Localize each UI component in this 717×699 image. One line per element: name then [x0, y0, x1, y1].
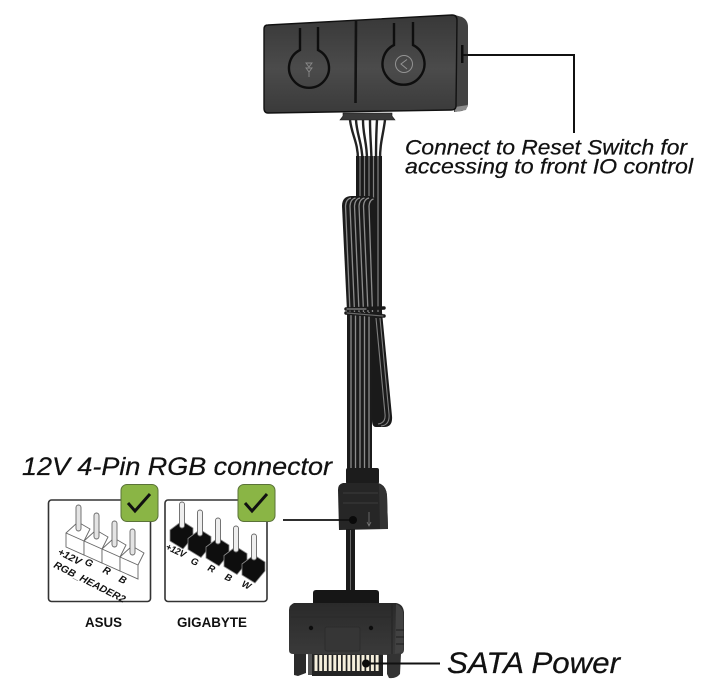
folded loop upper [342, 196, 377, 312]
lower straight wires [347, 312, 372, 469]
seam between buttons [354, 21, 357, 103]
label: reset switch: accessing to front IO control [405, 156, 694, 178]
keyhole right [382, 22, 425, 85]
cable tie [346, 308, 384, 316]
label: GIGABYTE: GIGABYTE [177, 615, 247, 630]
icon: arrows [306, 63, 312, 77]
icon: logo [396, 56, 412, 72]
pin labels: R [101, 565, 113, 578]
box neck [340, 113, 395, 120]
pin labels [164, 542, 253, 593]
badge: ASUS check [121, 484, 158, 522]
pin labels: +12V [164, 542, 188, 561]
cable bundle [342, 120, 392, 469]
leader line: SATA [362, 660, 440, 668]
contacts [312, 654, 383, 676]
pin labels: G [189, 556, 201, 569]
panel: GIGABYTE header [164, 500, 267, 602]
pins: white [66, 505, 144, 579]
label: reset switch: Connect to Reset Switch for [405, 136, 688, 160]
thin cable [346, 529, 355, 591]
controller box [264, 15, 468, 120]
front face [264, 15, 457, 113]
leader line: reset switch [463, 55, 574, 133]
label: SATA Power: SATA Power [447, 647, 621, 680]
side keys [294, 654, 306, 676]
keyhole left [289, 27, 329, 88]
heading: 12V 4-Pin RGB connector: 12V 4-Pin RGB connector [22, 453, 334, 481]
panel: ASUS header [48, 500, 150, 606]
pin labels: RGB_HEADER2 [52, 560, 127, 606]
leader line: RGB connector [283, 516, 357, 524]
upper wires fanning from the box [350, 120, 385, 160]
pin labels: +12V [56, 547, 84, 569]
pin labels: B [223, 572, 234, 585]
badge: GIGABYTE check [238, 484, 275, 522]
side face [454, 15, 468, 112]
reset slot [461, 45, 464, 63]
label: reset switch [405, 136, 694, 178]
pin labels: B [117, 574, 128, 587]
RGB connector [338, 468, 388, 591]
pin labels: W [240, 579, 253, 593]
label: ASUS: ASUS [85, 615, 122, 630]
pin labels: G [83, 557, 95, 570]
SATA connector [289, 590, 404, 678]
pin labels: R [206, 563, 217, 576]
folded loop lower [372, 312, 392, 427]
